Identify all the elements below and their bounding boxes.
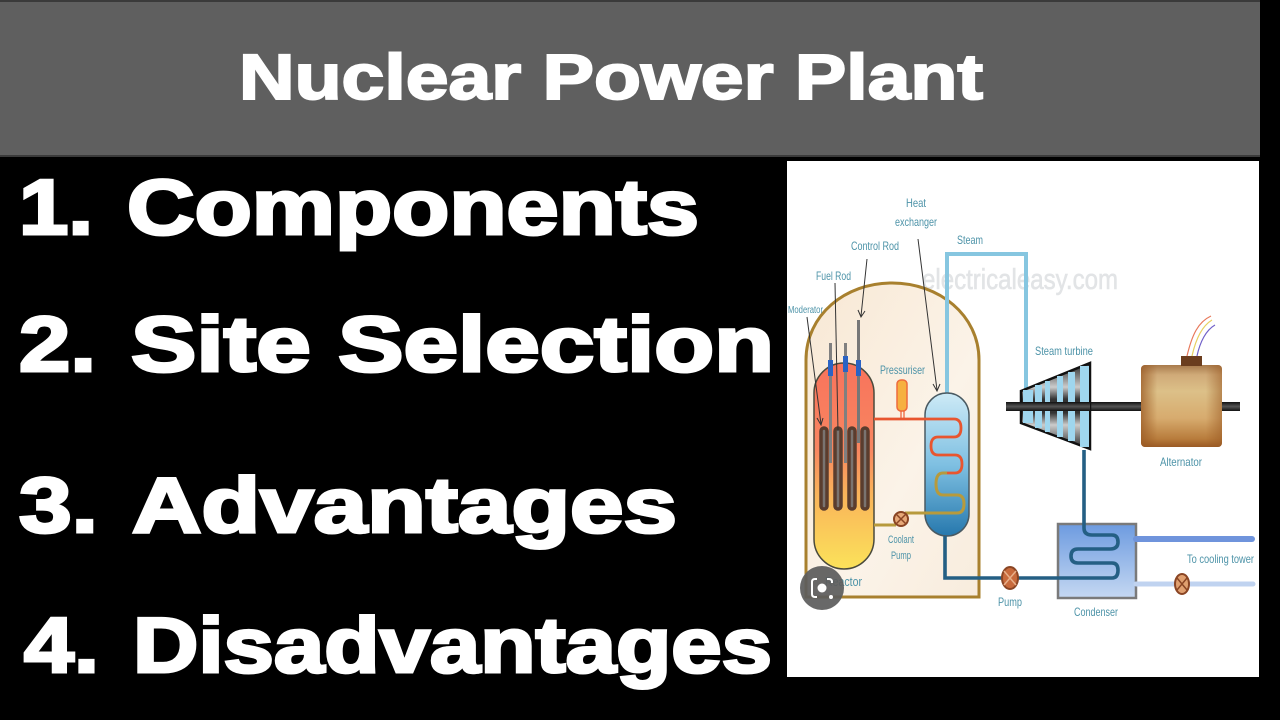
pressuriser [897,380,907,419]
containment dome [806,283,979,597]
cooling tower pump [1175,574,1189,594]
fuel rods [821,428,868,509]
coolant pump [894,512,908,526]
title banner [0,0,1260,157]
labels: Condenser [1074,605,1118,619]
labels: exchanger [895,215,937,229]
labels: Steam [957,233,983,247]
labels: Control Rod [851,239,899,253]
labels: Alternator [1160,455,1202,469]
condenser [945,450,1136,598]
cold coolant coil [874,473,964,525]
watermark: electricaleasy.com [922,264,1118,296]
labels: Fuel Rod [816,269,851,283]
labels: Pressuriser [880,363,925,377]
alternator [1141,316,1222,447]
heading: 3. Advantages: Advantages [132,461,677,549]
shaft [1006,402,1240,411]
heading: 1. Components: Components [127,163,699,251]
heading: 1. Components: 1. [19,163,93,251]
heading: 2. Site Selection: 2. [19,300,96,388]
callout arrows [807,239,940,431]
steam pipe [947,254,1026,393]
labels: Reactor [825,574,863,589]
labels: Coolant [888,534,914,546]
labels [788,196,1254,619]
labels: Moderator [788,305,824,316]
cooling water pipes [1136,536,1252,542]
pump [1002,567,1018,589]
heading: 3. Advantages [19,461,677,549]
heat exchanger [925,393,969,536]
labels: Pump [891,550,911,562]
heading: 2. Site Selection [19,300,774,388]
hot coolant coil [874,419,962,473]
feedwater pipe and coil [945,450,1118,578]
heading: 2. Site Selection: Site Selection [131,300,774,388]
steam turbine [1006,363,1090,449]
reactor vessel [814,320,874,569]
panel: power plant diagram [787,161,1259,677]
heading: 4. Disadvantages: 4. [24,601,99,689]
control rods [828,320,861,463]
labels: Heat [906,196,927,210]
labels: Pump [998,595,1022,609]
heading: 4. Disadvantages: Disadvantages [133,601,772,689]
labels: Steam turbine [1035,344,1093,358]
labels: To cooling tower [1187,552,1254,566]
title: Nuclear Power Plant [239,41,983,113]
heading: 3. Advantages: 3. [19,461,98,549]
icon: image search lens [800,566,844,610]
